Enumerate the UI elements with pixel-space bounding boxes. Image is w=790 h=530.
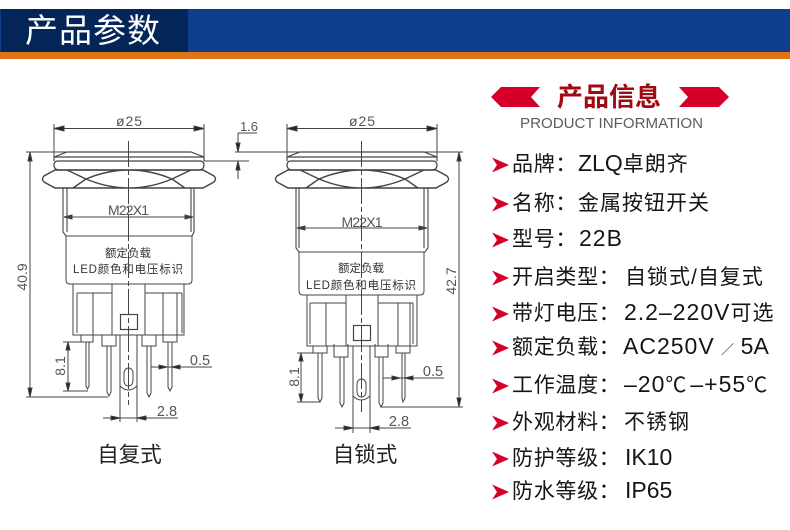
section title: 产品信息 — [557, 82, 661, 112]
spec: name: 金属按钮开关 — [578, 192, 710, 215]
caption: self reset: 自复式 — [97, 443, 162, 467]
rating label body — [299, 252, 424, 295]
spec: name: 名称： — [512, 192, 577, 215]
top cap and rings — [54, 152, 204, 170]
body text LED: LED颜色和电压标识 — [306, 278, 416, 292]
dia label: ø25 — [349, 113, 375, 129]
lower housing — [73, 284, 184, 335]
thread dimension — [297, 226, 427, 230]
spec: protection rating: IK10 — [625, 444, 672, 470]
spec: brand: ZLQ卓朗齐 — [578, 150, 689, 176]
dia 25 dimension — [287, 113, 437, 157]
0.5 label: 0.5 — [190, 353, 210, 369]
thread label: M22X1 — [342, 214, 383, 230]
thread label: M22X1 — [108, 202, 149, 218]
panel: product information — [491, 82, 729, 132]
header blue bar — [0, 9, 790, 52]
rating label body — [66, 236, 192, 284]
spec: model — [492, 225, 623, 251]
spec: opening type: 自锁式/自复式 — [625, 266, 764, 289]
body text LED: LED颜色和电压标识 — [73, 262, 183, 276]
1.6 dimension — [204, 119, 463, 179]
hex nut — [276, 170, 448, 188]
diagrams: switch drawings — [14, 113, 463, 467]
42.7 label: 42.7 — [443, 267, 459, 295]
spec: rated load: AC250V 5A — [623, 333, 769, 359]
spec: rated load — [492, 333, 769, 359]
spec: working temperature: 工作温度： — [512, 374, 620, 397]
small window — [354, 326, 370, 340]
spec: waterproof rating — [492, 477, 672, 503]
thread section — [63, 188, 194, 236]
spec: rated load: ／ — [721, 342, 734, 357]
right switch drawing — [276, 113, 463, 467]
spec: working temperature: –20℃–+55℃ — [624, 371, 768, 397]
hex nut — [42, 170, 216, 188]
2.8 dimension — [335, 414, 411, 430]
spec: opening type: 开启类型： — [512, 266, 620, 289]
caption: self locking: 自锁式 — [333, 443, 397, 467]
thread section — [296, 188, 428, 252]
8.1 label: 8.1 — [286, 367, 302, 387]
pins — [318, 346, 405, 433]
2.8 label: 2.8 — [389, 414, 409, 430]
40.9 label: 40.9 — [14, 263, 30, 291]
lower housing — [307, 295, 417, 346]
body text: 额定负载 — [338, 261, 384, 275]
dia label: ø25 — [116, 113, 142, 129]
40.9 dimension — [14, 152, 108, 397]
8.1 dimension — [286, 353, 320, 402]
spec: protection rating — [492, 444, 672, 470]
spec: opening type — [492, 266, 764, 289]
centre line — [128, 141, 130, 405]
small window — [120, 314, 138, 330]
spec: exterior material: 外观材料： — [512, 411, 620, 434]
spec: exterior material — [492, 411, 690, 434]
1.6 label: 1.6 — [240, 119, 258, 134]
8.1 label: 8.1 — [52, 356, 68, 376]
heading: product parameters — [1, 9, 188, 52]
8.1 dimension — [52, 342, 88, 391]
pin blocks — [81, 335, 177, 346]
pins — [86, 335, 172, 422]
spec: brand — [492, 150, 689, 176]
left ribbon — [491, 87, 540, 107]
spec: working temperature — [492, 371, 768, 397]
body text: 额定负载 — [105, 246, 151, 260]
0.5 label: 0.5 — [423, 364, 443, 380]
pin blocks — [313, 344, 410, 357]
header band — [0, 9, 790, 59]
spec: waterproof rating: 防水等级： — [512, 480, 620, 503]
centre line — [360, 141, 362, 412]
spec: model: 22B — [579, 225, 623, 251]
2.8 label: 2.8 — [157, 404, 177, 420]
spec: lamp voltage: 2.2–220V可选 — [624, 299, 774, 325]
top cap and rings — [287, 152, 437, 170]
right ribbon — [679, 87, 729, 107]
spec: lamp voltage: 带灯电压： — [512, 302, 620, 325]
section subtitle: PRODUCT INFORMATION — [520, 115, 703, 132]
section heading ribbon — [491, 87, 729, 107]
2.8 dimension — [103, 404, 178, 420]
heading: product parameters: 产品参数 — [25, 12, 161, 49]
spec: exterior material: 不锈钢 — [624, 411, 690, 434]
0.5 dimension — [383, 364, 444, 380]
spec: protection rating: 防护等级： — [512, 447, 620, 470]
spec: model: 型号： — [512, 228, 577, 251]
0.5 dimension — [151, 353, 212, 369]
dia 25 dimension — [54, 113, 204, 157]
thread dimension — [64, 215, 193, 219]
spec: brand: 品牌： — [512, 153, 577, 176]
header orange rule — [0, 52, 790, 59]
42.7 dimension — [381, 152, 463, 407]
spec: rated load: 额定负载： — [512, 336, 620, 359]
spec: lamp voltage — [492, 299, 774, 325]
spec: waterproof rating: IP65 — [625, 477, 672, 503]
spec: name — [492, 192, 710, 215]
left switch drawing — [14, 113, 463, 467]
